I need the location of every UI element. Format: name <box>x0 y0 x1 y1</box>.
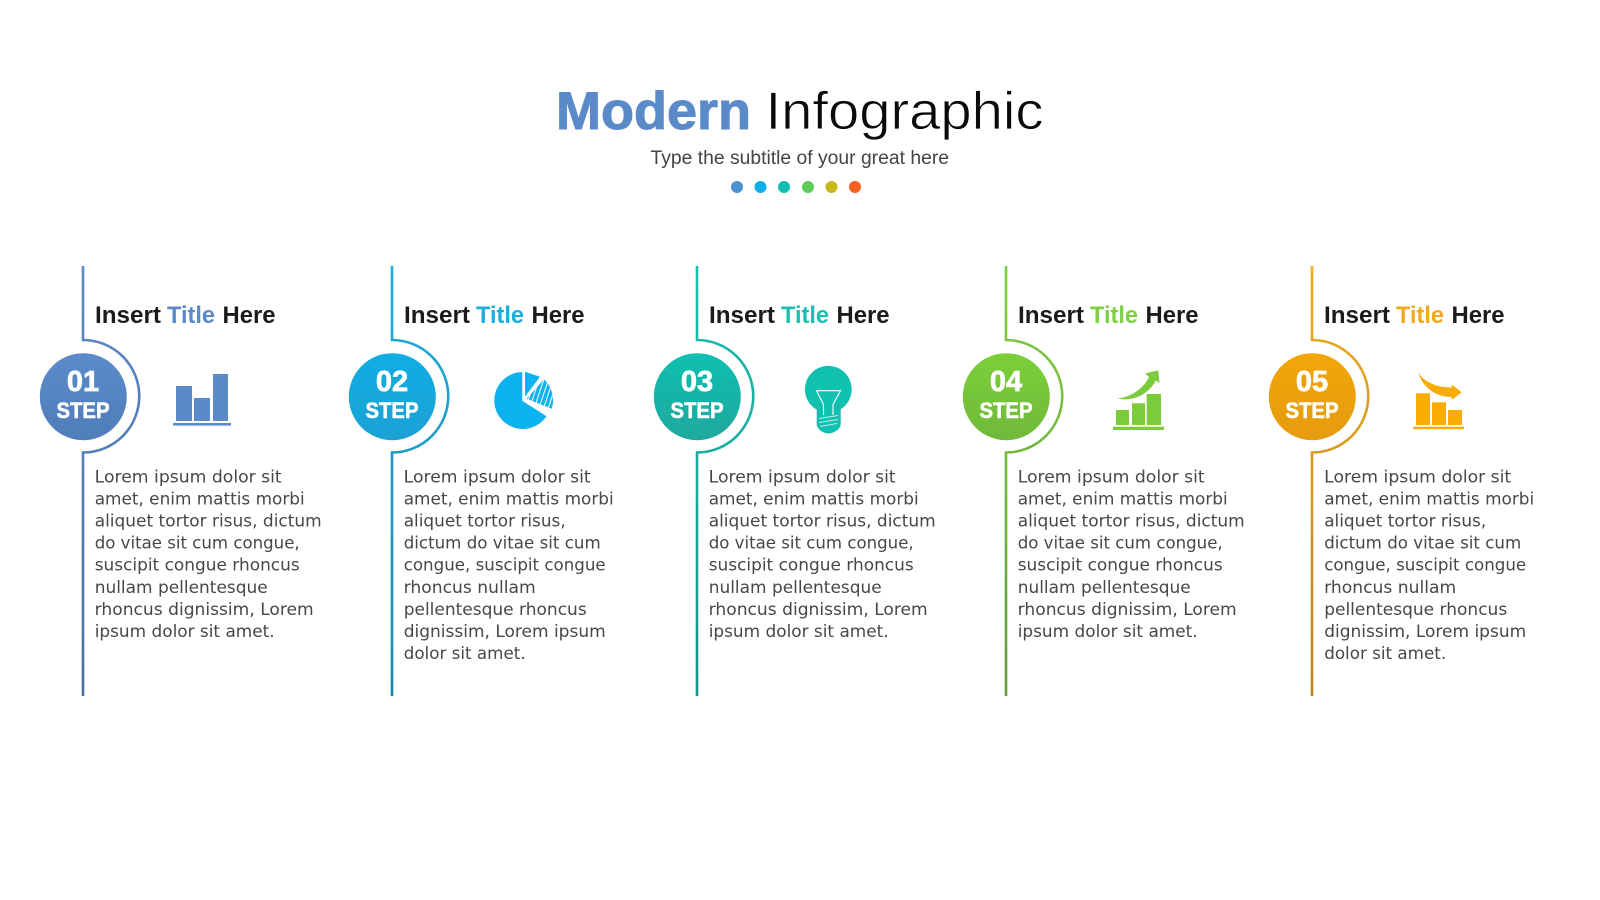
step 03 heading: Here <box>836 302 890 329</box>
step 01 body text <box>95 467 322 642</box>
step 01 body text: aliquet tortor risus, dictum <box>95 512 322 532</box>
subtitle: Type the subtitle of your great here <box>650 148 949 169</box>
step 05 heading <box>1324 302 1504 329</box>
step 05 body text: dictum do vitae sit cum <box>1324 534 1521 554</box>
step 02 heading <box>404 302 584 329</box>
step 02 heading: Insert <box>404 302 470 329</box>
title: Infographic <box>766 82 1044 141</box>
step 02 badge <box>349 353 436 440</box>
step 05 heading: Insert <box>1324 302 1390 329</box>
step 03 body text <box>709 467 936 642</box>
panel: step 03 <box>654 266 936 696</box>
icon: pie chart <box>494 372 557 429</box>
step 05 heading: Title <box>1396 302 1444 329</box>
step 01 body text: Lorem ipsum dolor sit <box>95 467 282 487</box>
icon: falling bar chart with arrow <box>1413 373 1464 429</box>
step 03 badge: STEP <box>670 398 724 423</box>
step 03 body text: ipsum dolor sit amet. <box>709 622 889 642</box>
step 04 body text: Lorem ipsum dolor sit <box>1018 467 1205 487</box>
step 04 body text <box>1018 467 1245 642</box>
step 05 badge: 05 <box>1296 366 1328 398</box>
step 04 badge: 04 <box>990 366 1022 398</box>
step 03 heading: Insert <box>709 302 775 329</box>
step 01 body text: amet, enim mattis morbi <box>95 489 305 509</box>
step 03 heading <box>709 302 890 329</box>
step 04 body text: suscipit congue rhoncus <box>1018 556 1223 576</box>
step 04 body text: nullam pellentesque <box>1018 578 1191 598</box>
step 05 body text: dignissim, Lorem ipsum <box>1324 622 1526 642</box>
step 05 body text: aliquet tortor risus, <box>1324 512 1486 532</box>
step 02 body text: congue, suscipit congue <box>404 556 606 576</box>
step 05 body text: rhoncus nullam <box>1324 578 1456 598</box>
icon: rising bar chart with arrow <box>1113 370 1164 430</box>
step 05 badge: STEP <box>1286 398 1338 423</box>
step 03 body text: aliquet tortor risus, dictum <box>709 512 936 532</box>
icon: bar chart <box>173 374 231 426</box>
step 05 body text: Lorem ipsum dolor sit <box>1324 467 1512 487</box>
step 01 badge: 01 <box>67 366 99 398</box>
step 04 badge: STEP <box>980 398 1032 423</box>
step 01 heading: Title <box>167 302 215 329</box>
panel: step 04 <box>963 266 1245 696</box>
step 02 body text: dolor sit amet. <box>404 644 526 664</box>
step 03 body text: nullam pellentesque <box>709 578 882 598</box>
step 01 body text: suscipit congue rhoncus <box>95 556 300 576</box>
step 01 body text: nullam pellentesque <box>95 578 268 598</box>
step 03 heading: Title <box>781 302 829 329</box>
step 05 body text: dolor sit amet. <box>1324 644 1446 664</box>
step 02 body text: pellentesque rhoncus <box>404 600 587 620</box>
step 01 heading: Insert <box>95 302 161 329</box>
step 02 body text: Lorem ipsum dolor sit <box>404 467 591 487</box>
icon: light bulb <box>805 366 852 434</box>
panel: step 01 <box>40 266 322 696</box>
step 03 body text: rhoncus dignissim, Lorem <box>709 600 928 620</box>
step 01 heading: Here <box>222 302 276 329</box>
step 04 body text: amet, enim mattis morbi <box>1018 489 1228 509</box>
step 01 badge <box>40 353 127 440</box>
step 03 badge: 03 <box>681 366 713 398</box>
step 03 body text: do vitae sit cum congue, <box>709 534 914 554</box>
step 03 badge <box>654 353 741 440</box>
step 03 body text: suscipit congue rhoncus <box>709 556 914 576</box>
panel: step 05 <box>1269 266 1534 696</box>
step 05 body text: amet, enim mattis morbi <box>1324 489 1534 509</box>
step 02 body text: dictum do vitae sit cum <box>404 534 601 554</box>
step 01 badge: STEP <box>56 398 110 423</box>
title: Modern <box>556 82 751 141</box>
step 05 body text: congue, suscipit congue <box>1324 556 1526 576</box>
step 05 heading: Here <box>1452 302 1504 329</box>
step 01 body text: do vitae sit cum congue, <box>95 534 300 554</box>
step 02 body text <box>404 467 614 664</box>
step 04 body text: rhoncus dignissim, Lorem <box>1018 600 1237 620</box>
step 02 body text: rhoncus nullam <box>404 578 536 598</box>
step 02 body text: amet, enim mattis morbi <box>404 489 614 509</box>
step 04 heading: Insert <box>1018 302 1084 329</box>
title <box>556 82 1044 141</box>
step 02 heading: Title <box>476 302 524 329</box>
step 04 badge <box>963 353 1050 440</box>
step 04 body text: ipsum dolor sit amet. <box>1018 622 1198 642</box>
step 02 body text: dignissim, Lorem ipsum <box>404 622 606 642</box>
step 04 heading: Here <box>1146 302 1198 329</box>
step 01 heading <box>95 302 276 329</box>
step 04 body text: aliquet tortor risus, dictum <box>1018 512 1245 532</box>
step 04 heading: Title <box>1090 302 1138 329</box>
step 04 body text: do vitae sit cum congue, <box>1018 534 1223 554</box>
step 02 heading: Here <box>532 302 584 329</box>
step 02 body text: aliquet tortor risus, <box>404 512 566 532</box>
step 05 badge <box>1269 353 1356 440</box>
step 05 body text: pellentesque rhoncus <box>1324 600 1507 620</box>
step 03 body text: Lorem ipsum dolor sit <box>709 467 896 487</box>
step 01 body text: rhoncus dignissim, Lorem <box>95 600 314 620</box>
step 03 body text: amet, enim mattis morbi <box>709 489 919 509</box>
step 04 heading <box>1018 302 1198 329</box>
step 05 body text <box>1324 467 1534 664</box>
step 01 body text: ipsum dolor sit amet. <box>95 622 275 642</box>
step 02 badge: 02 <box>376 366 408 398</box>
decorative colour dots <box>731 181 861 193</box>
step 02 badge: STEP <box>366 398 418 423</box>
panel: step 02 <box>349 266 614 696</box>
